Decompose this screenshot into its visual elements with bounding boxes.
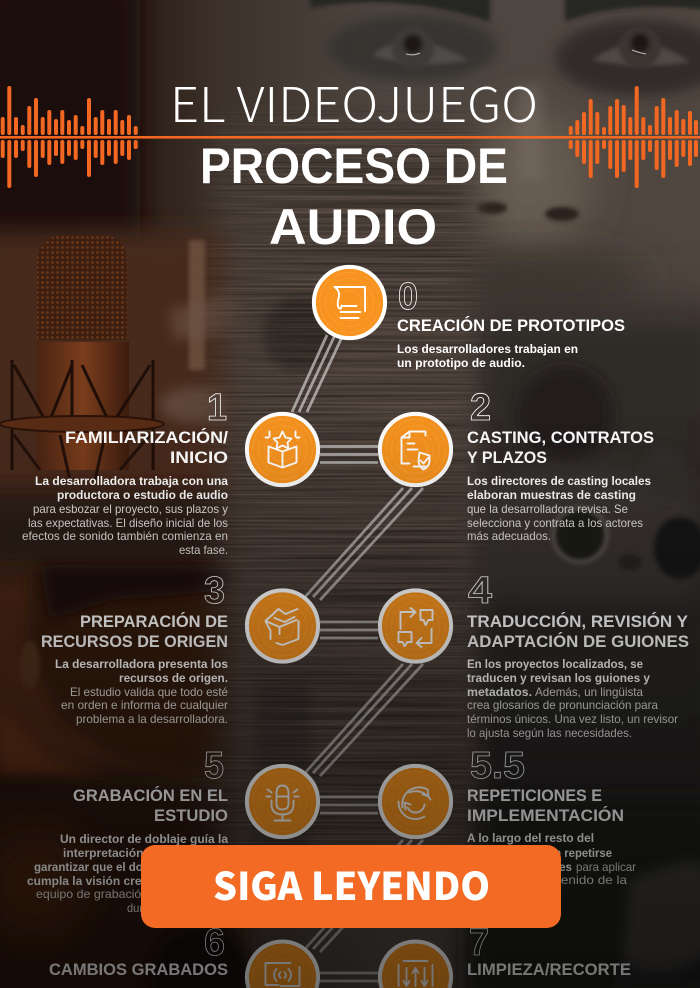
step 7 text bbox=[467, 922, 631, 979]
step 5 text: equipo de grabación guía la sesión bbox=[36, 887, 228, 901]
step 4 text: metadatos. bbox=[467, 685, 532, 699]
step 4 text: lo ajusta según las necesidades. bbox=[467, 726, 632, 740]
background: character with dark skin bbox=[0, 565, 235, 775]
waveform: right bbox=[571, 88, 696, 186]
background: right column below the face bbox=[470, 260, 700, 988]
step 3 text bbox=[41, 570, 228, 726]
step 2 text: Y PLAZOS bbox=[467, 449, 547, 467]
background: top left darkness bbox=[0, 0, 140, 240]
step 4 text: crea glosarios de pronunciación para bbox=[467, 698, 658, 712]
step 2 text: elaboran muestras de casting bbox=[467, 488, 636, 502]
step 1 node bbox=[246, 414, 318, 486]
waveform: left bbox=[3, 88, 136, 186]
step 2 node bbox=[380, 414, 452, 486]
button: siga leyendo bbox=[141, 845, 561, 928]
step 5 text: 5 bbox=[204, 745, 224, 787]
step 4 text: traducen y revisan los guiones y bbox=[467, 671, 650, 685]
step 5 text: durante la grabación bbox=[127, 901, 228, 915]
step 5 text: interpretación de los actores bbox=[63, 846, 228, 860]
step 2 text bbox=[467, 387, 654, 543]
step 0 node bbox=[314, 266, 386, 338]
background: studio and microphone bbox=[0, 232, 250, 572]
step 1 text: productora o estudio de audio bbox=[57, 488, 228, 502]
step 0 text: 0 bbox=[398, 276, 418, 318]
background: face bbox=[310, 0, 700, 315]
step 1 text: para esbozar el proyecto, sus plazos y bbox=[33, 502, 228, 516]
button: siga leyendo: SIGA LEYENDO bbox=[213, 856, 490, 911]
step 3 text: en orden e informa de cualquier bbox=[61, 698, 228, 712]
title: EL VIDEOJUEGO bbox=[170, 66, 538, 136]
icon: script and quill bbox=[334, 287, 365, 318]
lower fade overlay bbox=[0, 400, 700, 988]
background: centre streaked column bbox=[202, 110, 488, 845]
icon: open box with star bbox=[266, 432, 300, 468]
step 4 text: En los proyectos localizados, se bbox=[467, 657, 643, 671]
step 3 text: La desarrolladora presenta los bbox=[55, 657, 228, 671]
step 5 text: garantizar que el doblaje localizado bbox=[34, 860, 228, 874]
title: PROCESO DE bbox=[200, 138, 508, 194]
connector lines bbox=[292, 335, 423, 981]
step 3 node bbox=[246, 590, 318, 662]
icon: contract and shield bbox=[402, 432, 430, 470]
step 4 text: términos únicos. Una vez listo, un revisor bbox=[467, 712, 678, 726]
step 5 node bbox=[246, 766, 318, 838]
step 1 text: La desarrolladora trabaja con una bbox=[35, 474, 228, 488]
step 3 text: recursos de origen. bbox=[119, 671, 228, 685]
step 0 text bbox=[397, 276, 625, 370]
step 4 text: Además, un lingüista bbox=[535, 685, 643, 699]
step 2 text: 2 bbox=[470, 387, 491, 429]
step 5 text: GRABACIÓN EN EL bbox=[73, 786, 228, 805]
step 1 text: FAMILIARIZACIÓN/ bbox=[65, 428, 228, 447]
step 3 text: problema a la desarrolladora. bbox=[76, 712, 228, 726]
step 5 text: ESTUDIO bbox=[154, 807, 228, 825]
step 2 text: CASTING, CONTRATOS bbox=[467, 429, 654, 447]
title bbox=[170, 66, 538, 255]
step 4 text: ADAPTACIÓN DE GUIONES bbox=[467, 632, 689, 651]
icon: repeat arrows bbox=[398, 787, 430, 819]
step 4 text: TRADUCCIÓN, REVISIÓN Y bbox=[467, 612, 688, 631]
step 4 node bbox=[380, 590, 452, 662]
step 6 node bbox=[246, 941, 318, 988]
step 0 text: un prototipo de audio. bbox=[397, 356, 525, 370]
step 1 text: efectos de sonido también comienza en bbox=[22, 529, 228, 543]
step 5.5 text: cambios al contenido de la bbox=[467, 873, 627, 887]
background: cartoon raccoon bbox=[480, 367, 700, 600]
step 1 text: las expectativas. El diseño inicial de los bbox=[28, 516, 228, 530]
step 1 text: INICIO bbox=[170, 449, 228, 467]
step 5.5 text: proyecto, pueden repetirse bbox=[467, 846, 612, 860]
step 0 text: Los desarrolladores trabajan en bbox=[397, 342, 578, 356]
step 3 text: PREPARACIÓN DE bbox=[80, 612, 228, 631]
icon: microphone bbox=[266, 786, 298, 820]
step 5.5 text: IMPLEMENTACIÓN bbox=[467, 806, 624, 825]
step 5.5 text: REPETICIONES E bbox=[467, 787, 602, 805]
step 5 text: Un director de doblaje guía la bbox=[60, 832, 228, 846]
step 5.5 node bbox=[380, 766, 452, 838]
step 5 text bbox=[27, 745, 228, 915]
step 2 text: más adecuados. bbox=[467, 529, 551, 543]
icon: mixing sliders bbox=[398, 961, 432, 986]
step 1 text bbox=[22, 387, 228, 557]
step 3 text: 3 bbox=[204, 570, 225, 612]
step 3 text: El estudio valida que todo esté bbox=[70, 685, 228, 699]
icon: opened cardboard box bbox=[266, 609, 298, 645]
waveform baseline bbox=[0, 136, 700, 139]
icon: screen with sound waves bbox=[266, 963, 300, 986]
background: bearded man lower right bbox=[470, 800, 700, 988]
step 2 text: Los directores de casting locales bbox=[467, 474, 651, 488]
step 1 text: 1 bbox=[207, 387, 227, 429]
step 6 text: CAMBIOS GRABADOS bbox=[49, 961, 228, 979]
step 5.5 text: 5.5 bbox=[470, 745, 525, 787]
step 5 text: cumpla la visión creativa del juego. bbox=[27, 874, 228, 888]
step 7 text: 7 bbox=[469, 922, 489, 964]
step 7 node bbox=[380, 941, 452, 988]
step 5.5 text bbox=[467, 745, 636, 887]
step 6 text: 6 bbox=[204, 922, 225, 964]
step 4 text bbox=[467, 570, 689, 740]
step 0 text: CREACIÓN DE PROTOTIPOS bbox=[397, 316, 625, 335]
step 1 text: esta fase. bbox=[179, 543, 228, 557]
title: AUDIO bbox=[269, 199, 437, 255]
background: lower left speaker bbox=[0, 785, 250, 988]
step 3 text: RECURSOS DE ORIGEN bbox=[41, 633, 228, 651]
step 5.5 text: varias grabaciones bbox=[467, 860, 572, 874]
step 5.5 text: para aplicar bbox=[576, 860, 636, 874]
step 2 text: que la desarrolladora revisa. Se bbox=[467, 502, 628, 516]
step 4 text: 4 bbox=[468, 570, 492, 612]
step 2 text: selecciona y contrata a los actores bbox=[467, 516, 643, 530]
step 7 text: LIMPIEZA/RECORTE bbox=[467, 961, 631, 979]
step 6 text bbox=[49, 922, 228, 979]
step 5.5 text: A lo largo del resto del bbox=[467, 831, 594, 845]
icon: translating speech bubbles bbox=[398, 608, 432, 647]
